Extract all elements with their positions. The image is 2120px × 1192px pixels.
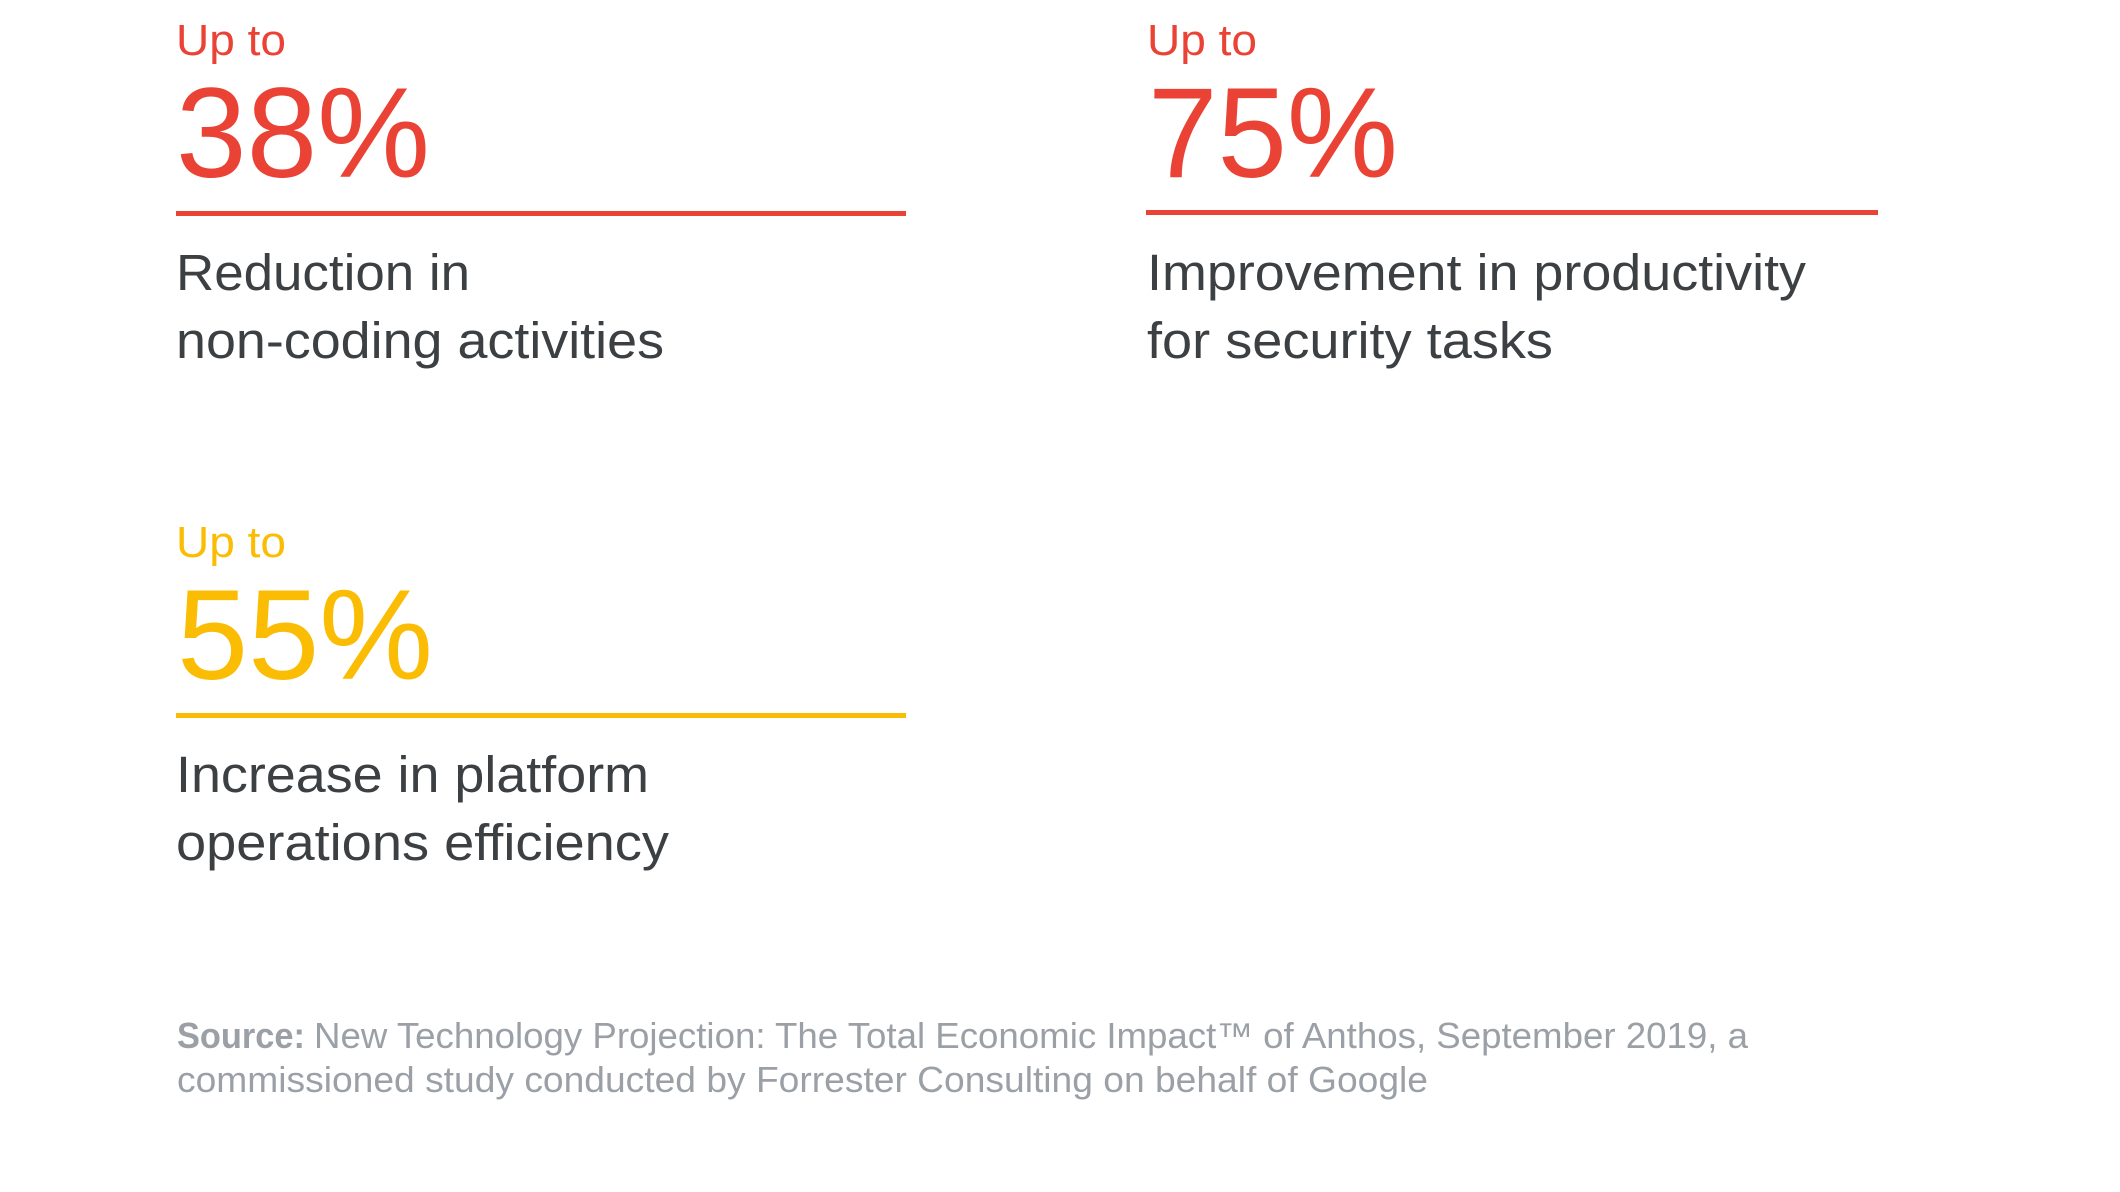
description: increase in platform operations efficiency (176, 746, 670, 871)
source note: New Technology Projection: The Total Economic Impact™ of Anthos, September 2019, a (314, 1015, 1749, 1056)
panel: 75% improvement in productivity for security tasks (1146, 16, 1878, 369)
description: reduction in non-coding activities: Reduction in (176, 244, 470, 301)
description: reduction in non-coding activities (176, 244, 664, 369)
panel: 38% reduction in non-coding activities (176, 16, 906, 369)
description: increase in platform operations efficiency: Increase in platform (176, 746, 649, 803)
rule: red (1146, 210, 1878, 215)
source note: Source: (177, 1015, 305, 1056)
stat: 75%: 75% (1148, 62, 1398, 205)
rule: yellow (176, 713, 906, 718)
description: improvement in productivity for security tasks (1147, 244, 1807, 369)
stat: 38%: 38% (176, 62, 430, 205)
description: improvement in productivity for security tasks: for security tasks (1147, 312, 1553, 369)
label: up to: Up to (1147, 16, 1257, 65)
description: increase in platform operations efficiency: operations efficiency (176, 814, 670, 871)
description: improvement in productivity for security tasks: Improvement in productivity (1147, 244, 1807, 301)
stat: 55%: 55% (177, 564, 433, 707)
rule: red (176, 211, 906, 216)
source note: commissioned study conducted by Forrester Consulting on behalf of Google (177, 1059, 1428, 1100)
source note (177, 1015, 1749, 1100)
label: up to: Up to (176, 16, 286, 65)
description: reduction in non-coding activities: non-coding activities (176, 312, 664, 369)
panel: 55% increase in platform operations efficiency (176, 518, 906, 871)
label: up to: Up to (176, 518, 286, 567)
